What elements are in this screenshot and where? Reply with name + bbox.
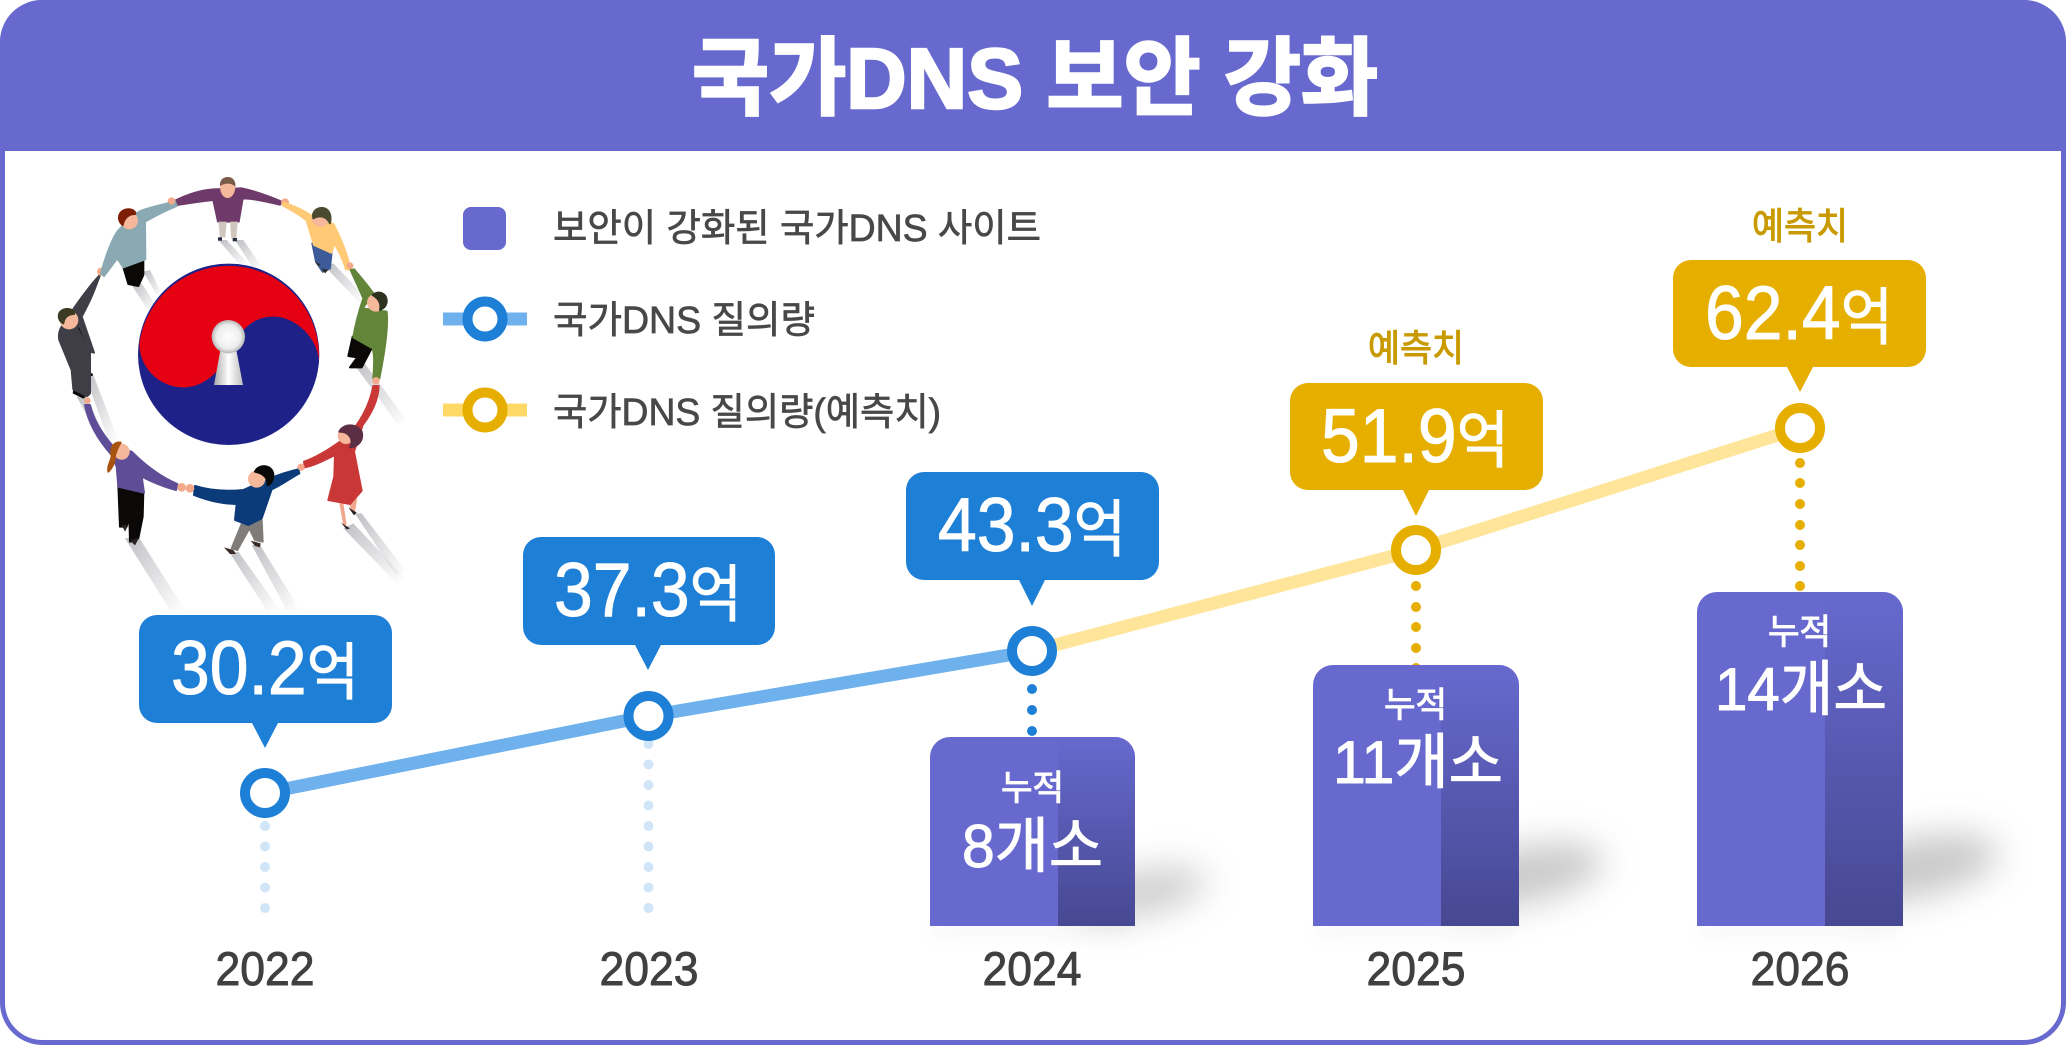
callout: 2026 forecast [1673,260,1926,392]
callout: 2025 forecast: 51.9억 [1321,394,1509,479]
bar shadows [935,821,2004,934]
taegeuk emblem with keyhole [138,264,319,445]
person: teal sweater [101,198,177,286]
line chart: DNS query volume [245,408,1820,813]
bar: 2026 [1697,592,1903,926]
bar: 2024: 8개소 [962,813,1103,880]
bar: 2026: 14개소 [1715,656,1887,723]
forecast label: 2026: 예측치 [1752,206,1848,247]
person: purple sweater top [168,177,289,241]
year axis labels [216,942,1850,995]
year axis labels: 2022 [216,942,314,995]
bar: 2025: 누적 [1384,686,1447,725]
bar: 2025 [1313,665,1519,926]
bar: 2024 [930,737,1135,926]
person: navy sweater [186,464,304,554]
person: yellow sweater [283,203,353,273]
bar: 2026: 누적 [1768,613,1831,652]
legend [443,207,1041,434]
person: dark suit [59,268,105,399]
nodes [245,408,1820,813]
year axis labels: 2025 [1366,942,1466,995]
year axis labels: 2026 [1750,942,1850,995]
person: green sweater [348,269,387,384]
person: red dress [297,386,379,529]
callout: 2026 forecast: 62.4억 [1705,271,1893,356]
bar chart: cumulative sites [260,458,2004,934]
header band [0,0,2066,151]
forecast label: 2025: 예측치 [1368,328,1464,369]
illustration: people circle around taegeuk keyhole [59,177,407,610]
bar: 2025: 11개소 [1333,729,1503,796]
legend item: query volume [443,300,815,342]
callout: 2025 forecast [1290,383,1543,516]
legend item: site: 보안이 강화된 국가DNS 사이트 [553,208,1041,250]
legend item: query volume: 국가DNS 질의량 [553,300,815,342]
callout: 2022 [139,615,392,748]
callout: 2022: 30.2억 [171,626,359,711]
line: forecast [1032,428,1800,651]
callout: 2024: 43.3억 [938,483,1126,568]
shadows of people [77,240,407,610]
dotted connectors [260,458,1805,913]
callout: 2023 [523,537,775,670]
bar: 2024: 누적 [1001,769,1064,808]
title: 국가DNS 보안 강화 [692,32,1378,127]
callout: 2024 [906,472,1159,606]
line: actual [265,651,1032,793]
callout: 2023: 37.3억 [554,548,742,633]
person: violet sweater [84,397,186,545]
year axis labels: 2023 [600,942,698,995]
year axis labels: 2024 [982,942,1082,995]
legend item: forecast query volume: 국가DNS 질의량(예측치) [553,392,941,434]
